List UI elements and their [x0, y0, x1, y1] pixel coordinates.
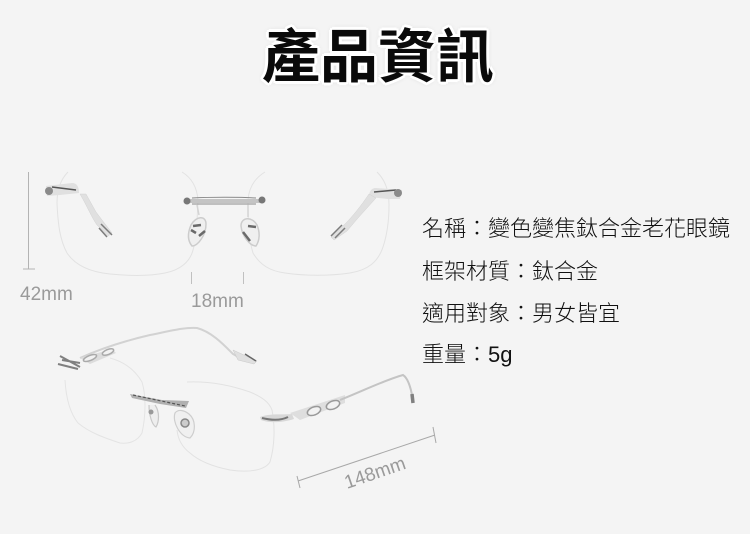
near lens outline	[177, 382, 274, 471]
dimension: 42mm	[20, 172, 73, 305]
perspective view glasses	[58, 328, 413, 471]
title: 產品資訊	[262, 10, 494, 94]
dimension: 42mm: 42mm	[20, 284, 73, 305]
dimension: 18mm	[191, 272, 244, 312]
left lens outline	[57, 172, 198, 275]
right temple	[331, 188, 402, 240]
spec: name: 名稱：變色變焦鈦合金老花眼鏡	[422, 216, 730, 241]
far lens outline	[65, 358, 145, 443]
spec: frame material: 框架材質：鈦合金	[422, 259, 598, 284]
front view glasses	[45, 172, 402, 275]
right lens outline	[248, 172, 389, 275]
far temple	[58, 328, 257, 369]
nose pads	[148, 405, 194, 438]
near temple	[260, 375, 413, 422]
bridge	[130, 394, 189, 408]
dimension: 18mm: 18mm	[191, 291, 244, 312]
bridge	[184, 196, 266, 204]
dimension: 148mm: 148mm	[342, 453, 409, 494]
dimension: 148mm	[297, 427, 436, 494]
spec: suitable for: 適用對象：男女皆宜	[422, 301, 620, 326]
nose pads	[188, 205, 259, 246]
spec: weight: 重量：5g	[422, 342, 512, 367]
left temple	[45, 183, 112, 237]
